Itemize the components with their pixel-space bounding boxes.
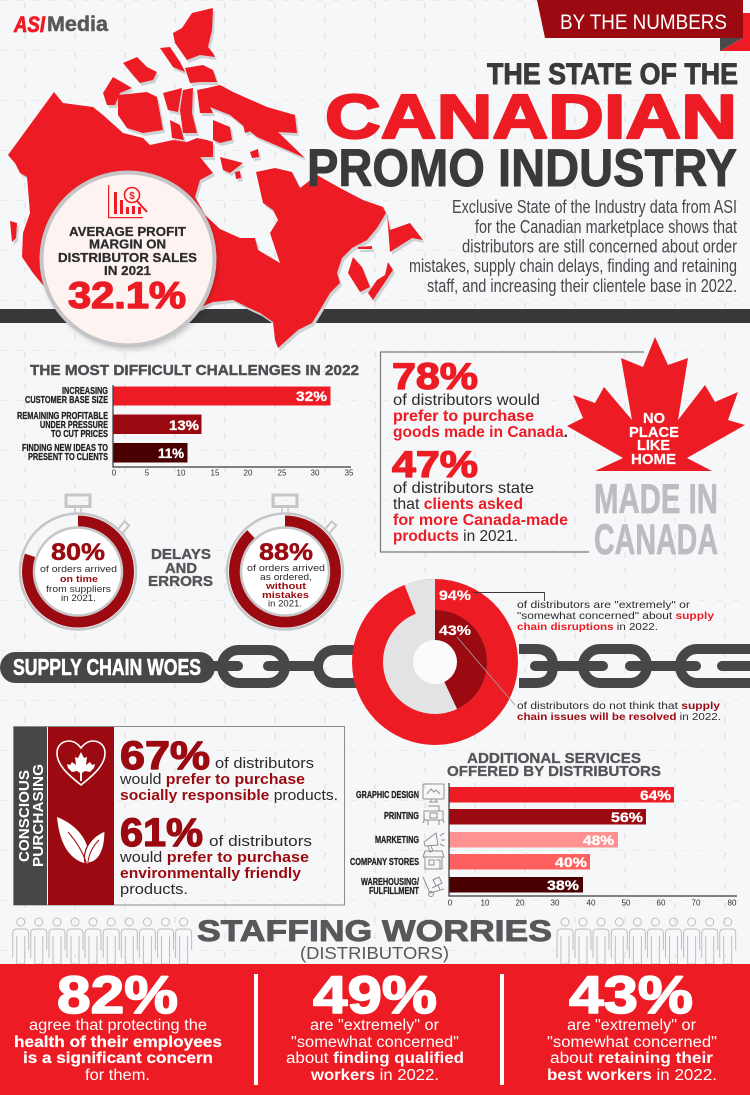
- stat: 67% socially responsible: socially responsible products.: [120, 788, 338, 804]
- logo: ASI Media: Media: [47, 13, 108, 36]
- callout: issues not resolved: of distributors do not think that supply: [517, 700, 720, 712]
- stopwatch: 88% without mistakes: without: [265, 581, 307, 592]
- stat: 82%: for them.: [85, 1067, 150, 1084]
- panel: made in Canada: products in 2021.: [393, 528, 518, 545]
- chart: additional services: 48%: [583, 832, 615, 848]
- stopwatch: 80% on time: [20, 495, 136, 630]
- chart: most difficult challenges: 10: [177, 468, 186, 478]
- chart: most difficult challenges: 0: [112, 468, 117, 478]
- stopwatch: 88% without mistakes: in 2021.: [268, 598, 302, 610]
- stat: 43%: best workers in 2022.: [547, 1067, 717, 1084]
- callout: supply chain disruptions: of distributors are "extremely" or: [517, 599, 691, 611]
- heading: supply chain woes with chain: SUPPLY CHAIN WOES: [13, 654, 201, 680]
- stat: 43%: are "extremely" or: [567, 1017, 696, 1034]
- panel: conscious purchasing: [14, 726, 344, 905]
- panel: made in Canada: that clients asked: [393, 496, 523, 513]
- chart: most difficult challenges: FINDING NEW IDEAS TO: [22, 442, 108, 454]
- vertical heading: PURCHASING: [31, 764, 47, 867]
- stat: 61% environmentally friendly: 61%: [120, 811, 203, 855]
- chart: additional services: 0: [448, 898, 453, 908]
- chart: additional services: 70: [692, 898, 701, 908]
- heading: staffing worries: [197, 915, 552, 963]
- chart: most difficult challenges: 20: [244, 468, 253, 478]
- right chain links: [519, 649, 750, 683]
- chart: most difficult challenges: REMAINING PROFITABLE: [17, 410, 108, 422]
- chart: most difficult challenges: INCREASING: [62, 385, 108, 397]
- panel: made in Canada: of distributors state: [393, 480, 534, 497]
- chart: most difficult challenges: 25: [278, 468, 287, 478]
- chart: additional services: 60: [657, 898, 666, 908]
- stopwatch: 88% without mistakes: as ordered,: [260, 572, 312, 583]
- callout: issues not resolved: [457, 637, 721, 723]
- stat: 61% environmentally friendly: environmentally friendly: [120, 866, 301, 882]
- icon: maple leaf: [567, 337, 745, 471]
- icon: profit chart with magnifier: $: [129, 191, 135, 202]
- chart title: THE MOST DIFFICULT CHALLENGES IN 2022: [30, 363, 359, 379]
- stat: 82%: 82%: [57, 966, 178, 1025]
- stat: 43%: 43%: [569, 966, 693, 1025]
- stat: 61% environmentally friendly: products.: [120, 882, 188, 898]
- left chain links: [210, 650, 388, 683]
- chart: additional services: FULFILLMENT: [369, 885, 419, 897]
- icon: maple leaf: NO: [643, 411, 665, 427]
- panel: made in Canada: for more Canada-made: [393, 512, 568, 529]
- callout circle: average profit margin: MARGIN ON: [89, 238, 166, 252]
- icon: printer: [423, 806, 444, 825]
- title: CANADIAN: [325, 82, 737, 152]
- icon: hand truck with boxes: [423, 877, 444, 896]
- stat: 67% socially responsible: of distributors: [215, 756, 314, 772]
- heading: staffing worries: (DISTRIBUTORS): [300, 943, 449, 963]
- heading: supply chain woes with chain: [0, 650, 388, 683]
- stat: 49%: workers in 2022.: [310, 1067, 439, 1084]
- chart: most difficult challenges: 30: [311, 468, 320, 478]
- stat: 43%: about retaining their: [550, 1050, 713, 1067]
- panel: made in Canada: 78%: [392, 355, 478, 397]
- chart: additional services: COMPANY STORES: [350, 856, 419, 868]
- chart: additional services: 38%: [547, 877, 580, 893]
- callout: supply chain disruptions: chain disruptions in 2022.: [517, 621, 658, 633]
- panel: made in Canada: [380, 337, 745, 564]
- chart: most difficult challenges: CUSTOMER BASE SIZE: [25, 394, 108, 406]
- chart: additional services: 64%: [640, 787, 672, 803]
- chart: additional services: MARKETING: [375, 834, 419, 846]
- stopwatch: 80% on time: from suppliers: [46, 584, 111, 595]
- stat: 67% socially responsible: 67%: [120, 734, 210, 778]
- ribbon: by the numbers: BY THE NUMBERS: [560, 11, 727, 34]
- chart: most difficult challenges: 13%: [169, 417, 200, 433]
- chart: most difficult challenges: [17, 363, 359, 478]
- chart title: ADDITIONAL SERVICES: [467, 751, 641, 767]
- panel: made in Canada: 47%: [392, 443, 478, 485]
- stat: 82%: is a significant concern: [23, 1050, 213, 1067]
- icon: maple leaf: PLACE: [629, 425, 679, 441]
- chart: most difficult challenges: 11%: [158, 445, 185, 461]
- icon: storefront: [423, 851, 444, 869]
- chart: additional services: GRAPHIC DESIGN: [356, 789, 419, 801]
- callout circle: average profit margin: AVERAGE PROFIT: [69, 225, 186, 239]
- chart: most difficult challenges: PRESENT TO CLIENTS: [28, 451, 108, 463]
- chart: additional services: 56%: [611, 809, 644, 825]
- chart: additional services: 20: [516, 898, 525, 908]
- stat: 61% environmentally friendly: would prefer to purchase: [119, 850, 309, 866]
- chart: additional services: PRINTING: [384, 810, 419, 822]
- logo: ASI Media: [13, 12, 108, 37]
- stat: 49%: "somewhat concerned": [291, 1034, 459, 1051]
- stopwatch: 80% on time: in 2021.: [61, 593, 96, 604]
- callout circle: average profit margin: 32.1%: [68, 275, 186, 316]
- callout circle: average profit margin: DISTRIBUTOR SALES: [58, 251, 197, 265]
- chart: additional services: 30: [551, 898, 560, 908]
- map of Canada: [8, 8, 423, 348]
- icon: graphic design monitor: [423, 784, 444, 802]
- chart: most difficult challenges: 35: [345, 468, 354, 478]
- stopwatch: 88% without mistakes: [227, 495, 343, 630]
- panel: staffing stats: [0, 964, 750, 1095]
- stopwatch: 88% without mistakes: mistakes: [262, 590, 309, 601]
- stat: 49%: 49%: [313, 966, 437, 1025]
- chart: most difficult challenges: 32%: [296, 388, 328, 404]
- header divider bar: [0, 309, 750, 323]
- chart: most difficult challenges: 5: [145, 468, 150, 478]
- stat: 82%: health of their employees: [14, 1034, 222, 1051]
- callout: issues not resolved: chain issues will be resolved in 2022.: [517, 711, 721, 723]
- callout circle: average profit margin: [42, 172, 217, 349]
- stat: 43%: "somewhat concerned": [547, 1034, 717, 1051]
- intro paragraph: [409, 196, 737, 296]
- vertical heading: CONSCIOUS: [17, 770, 33, 862]
- chart: additional services: 40%: [555, 854, 588, 870]
- stat: 61% environmentally friendly: [119, 811, 312, 898]
- stopwatch: 88% without mistakes: of orders arrived: [247, 563, 325, 574]
- ribbon: by the numbers: [537, 0, 750, 51]
- heading: delays and errors: DELAYS: [151, 547, 211, 563]
- icon: maple leaf: HOME: [631, 452, 676, 468]
- stopwatch: 88% without mistakes: 88%: [259, 539, 313, 566]
- stat: 49%: [286, 966, 464, 1084]
- panel: made in Canada: prefer to purchase: [393, 408, 534, 425]
- chart: most difficult challenges: UNDER PRESSURE: [40, 419, 108, 431]
- icon: megaphone: [424, 833, 445, 852]
- heading: delays and errors: AND: [165, 561, 197, 577]
- stopwatch: 80% on time: 80%: [51, 539, 105, 566]
- donut chart: supply chain: 94%: [439, 587, 472, 603]
- icon: leaves: [57, 817, 105, 864]
- callout: supply chain disruptions: "somewhat concerned" about supply: [517, 610, 714, 622]
- callout circle: average profit margin: IN 2021: [104, 264, 151, 278]
- stat: 49%: are "extremely" or: [310, 1017, 439, 1034]
- stopwatch: 80% on time: on time: [60, 574, 98, 585]
- chart title: OFFERED BY DISTRIBUTORS: [447, 764, 661, 780]
- heading: delays and errors: [148, 547, 213, 590]
- stat: 49%: about finding qualified: [286, 1050, 464, 1067]
- chart: most difficult challenges: 15: [211, 468, 220, 478]
- stopwatch: 80% on time: of orders arrived: [40, 564, 117, 575]
- icon: maple leaf: LIKE: [637, 438, 670, 454]
- chart: additional services: 40: [587, 898, 596, 908]
- donut chart: supply chain: [352, 579, 518, 745]
- icon row: people right: [557, 918, 736, 964]
- logo: ASI Media: ASI: [13, 12, 46, 37]
- panel: made in Canada: of distributors would: [393, 392, 540, 409]
- icon row: people left: [13, 918, 192, 964]
- chart: additional services: WAREHOUSING/: [361, 876, 419, 888]
- stat: 82%: [14, 966, 222, 1084]
- heading: staffing worries: STAFFING WORRIES: [197, 915, 552, 948]
- panel: made in Canada: goods made in Canada.: [393, 424, 568, 441]
- icon: heart with maple leaf: [57, 741, 105, 785]
- chart: additional services: [350, 751, 737, 908]
- chart: additional services: 50: [622, 898, 631, 908]
- vertical heading: [17, 764, 47, 867]
- stat: 43%: [547, 966, 717, 1084]
- stat: 61% environmentally friendly: of distributors: [209, 834, 312, 850]
- stat: 82%: agree that protecting the: [29, 1017, 207, 1034]
- chart: most difficult challenges: TO CUT PRICES: [51, 428, 108, 440]
- callout: supply chain disruptions: [473, 592, 714, 633]
- stat: 67% socially responsible: [119, 734, 338, 804]
- donut chart: supply chain: 43%: [439, 622, 472, 638]
- icon: profit chart with magnifier: [108, 185, 147, 218]
- title: [307, 58, 738, 198]
- chart: additional services: 80: [728, 898, 737, 908]
- chart title: [447, 751, 661, 780]
- chart: additional services: 10: [481, 898, 490, 908]
- stat: 67% socially responsible: would prefer to purchase: [119, 772, 305, 788]
- heading: delays and errors: ERRORS: [148, 574, 213, 590]
